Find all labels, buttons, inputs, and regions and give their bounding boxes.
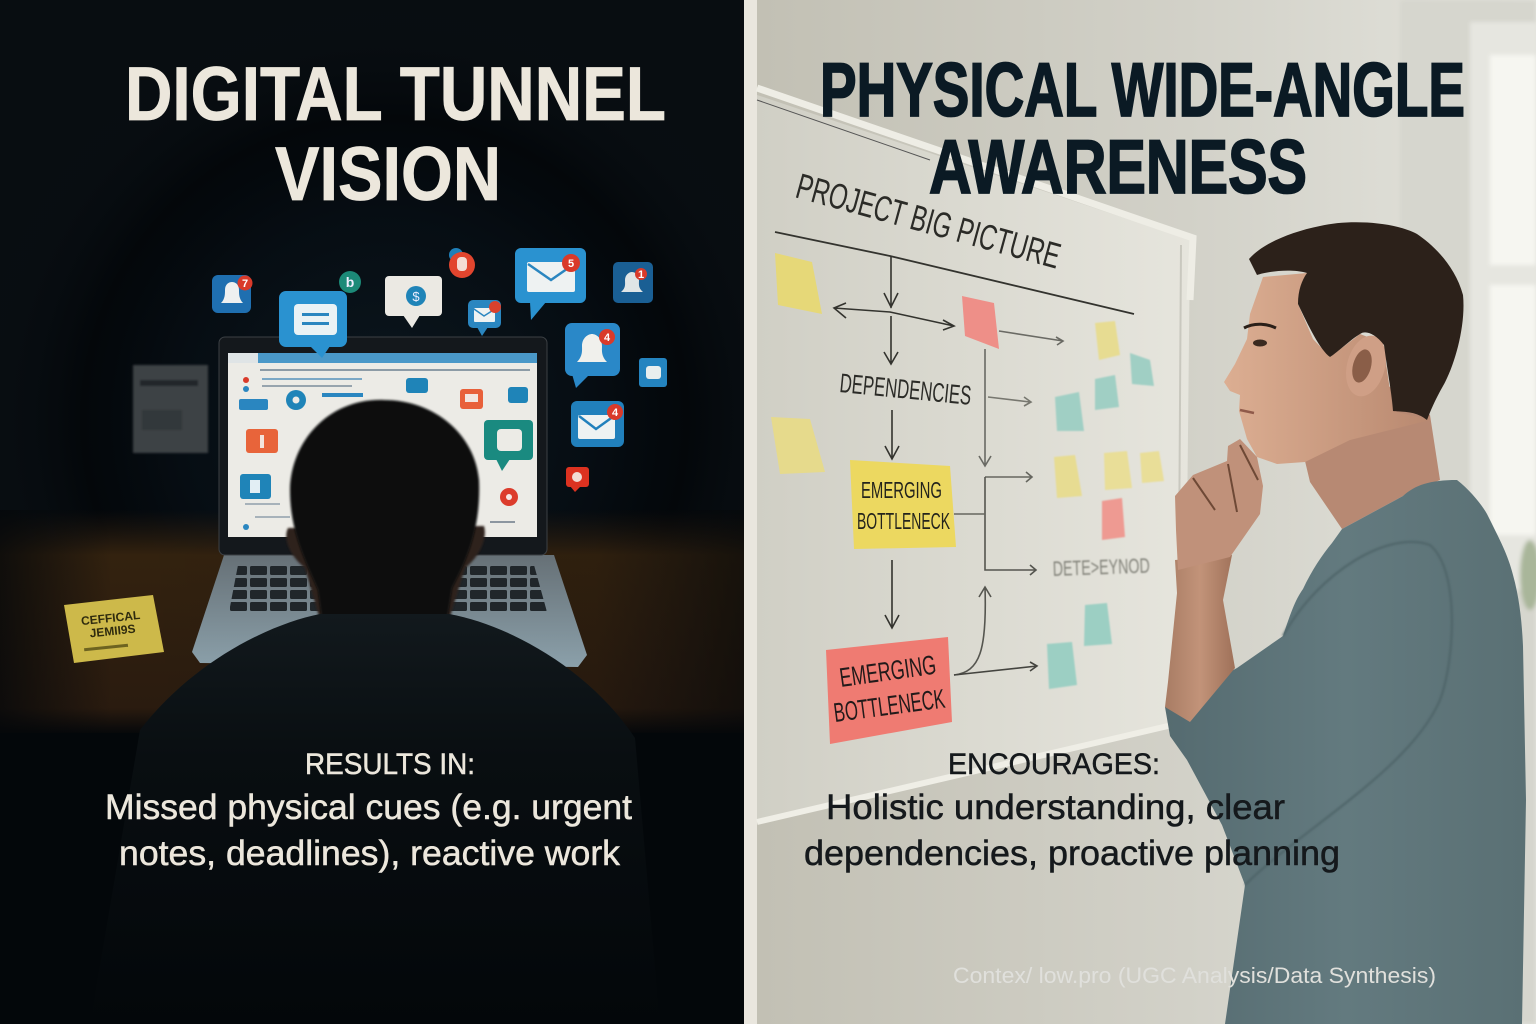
icon: mail 4 <box>571 401 624 447</box>
yellow note: emerging bottleneck: EMERGING <box>861 477 942 503</box>
encourages text <box>804 748 1340 873</box>
label: deteyendd: DETE>EYNOD <box>1052 555 1150 581</box>
title <box>820 48 1465 210</box>
icon: small mail <box>468 300 501 336</box>
icon: white bubble: $ <box>412 289 420 304</box>
divider <box>744 0 757 1024</box>
results text <box>105 748 632 873</box>
flow lines and arrows <box>775 232 1134 675</box>
title: VISION <box>275 132 501 217</box>
shirt <box>1165 480 1526 1024</box>
title: DIGITAL TUNNEL <box>125 52 666 137</box>
title: AWARENESS <box>929 125 1307 210</box>
icon: small square <box>639 358 667 387</box>
teal chat icon on screen <box>484 420 533 471</box>
icon: large mail 5: 5 <box>568 258 574 270</box>
sticky note on desk <box>64 595 164 663</box>
sticky notes <box>771 253 1164 689</box>
neck <box>1300 380 1440 529</box>
laptop <box>192 337 587 667</box>
icon: green badge: b <box>346 274 354 290</box>
red note: emerging bottleneck <box>826 637 952 744</box>
icon: mail 4: 4 <box>612 407 619 419</box>
wall note in shadow <box>133 365 208 453</box>
encourages text: dependencies, proactive planning <box>804 834 1340 873</box>
icon: bell 1 <box>613 262 653 303</box>
results text: Missed physical cues (e.g. urgent <box>105 788 632 827</box>
results text: RESULTS IN: <box>305 748 475 781</box>
icon: red small <box>566 467 589 492</box>
whiteboard <box>757 88 1193 822</box>
panel: digital tunnel vision <box>0 0 805 1024</box>
hair <box>1249 222 1463 420</box>
encourages text: Holistic understanding, clear <box>826 788 1285 827</box>
red note: emerging bottleneck: BOTTLENECK <box>832 684 947 728</box>
person <box>1165 222 1526 1024</box>
icon: bell 4: 4 <box>604 332 611 344</box>
floating notification icons <box>212 248 667 492</box>
icon: chat bubble <box>279 291 347 358</box>
whiteboard heading: PROJECT BIG PICTURE <box>792 165 1065 276</box>
results text: notes, deadlines), reactive work <box>119 834 621 873</box>
forearm <box>1165 555 1235 722</box>
silhouette of person <box>90 400 660 1024</box>
face <box>1224 273 1430 464</box>
sleeve seam <box>1245 542 1452 885</box>
icon: bell 1: 1 <box>638 269 644 281</box>
icon: green badge <box>339 271 361 293</box>
yellow note: emerging bottleneck <box>850 460 956 549</box>
yellow note: emerging bottleneck: BOTTLENECK <box>857 508 950 534</box>
panel: physical wide-angle awareness <box>757 0 1536 1024</box>
label: dependencies: DEPENDENCIES <box>838 368 973 411</box>
icon: bell 7 <box>212 275 252 313</box>
icon: white bubble <box>385 276 442 328</box>
icon: bell 7: 7 <box>242 278 248 290</box>
icon: large mail 5 <box>515 248 586 320</box>
ear <box>1340 331 1392 401</box>
sticky note on desk: CEFFICAL <box>80 608 141 628</box>
source credit: Contex/ low.pro (UGC Analysis/Data Synthesis) <box>953 963 1436 988</box>
icon: bell 4 <box>565 323 620 388</box>
hand <box>1175 439 1263 570</box>
window <box>1400 0 1536 1024</box>
eye and brow <box>1244 324 1276 328</box>
icon: red alert <box>449 248 475 278</box>
sticky note on desk: JEMII9S <box>89 622 136 640</box>
red note: emerging bottleneck: EMERGING <box>838 650 938 693</box>
encourages text: ENCOURAGES: <box>948 748 1160 781</box>
title <box>125 52 666 217</box>
